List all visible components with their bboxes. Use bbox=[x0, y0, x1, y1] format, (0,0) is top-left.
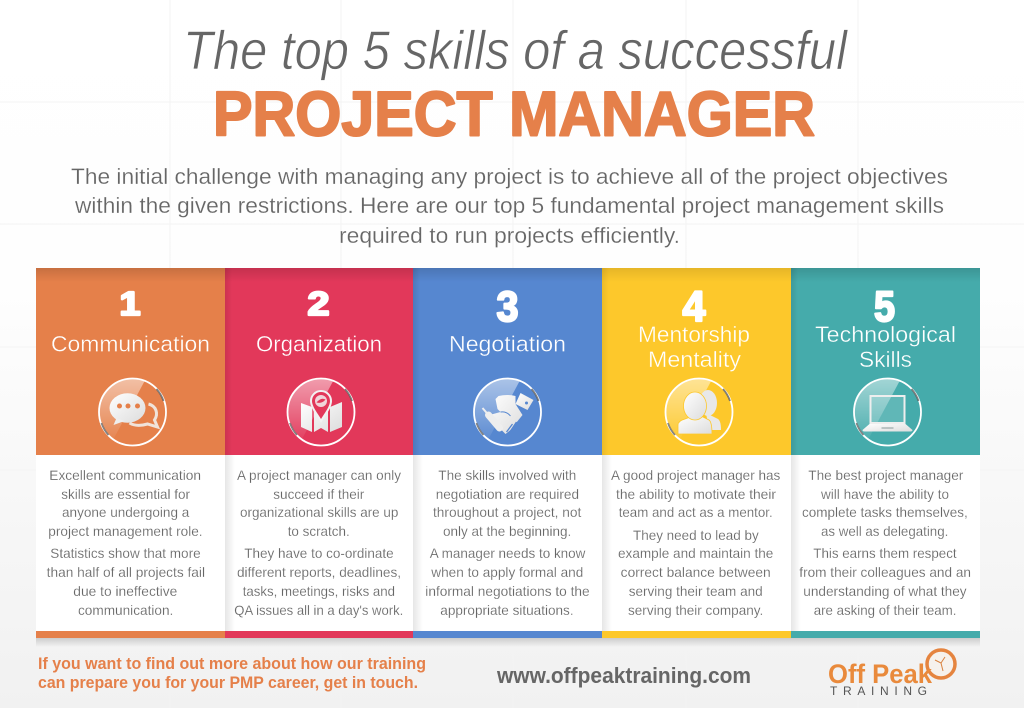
body text: complete tasks themselves, bbox=[802, 505, 968, 520]
heading: Mentality bbox=[648, 347, 741, 372]
panel: 4 Mentorship Mentality bbox=[602, 268, 791, 638]
body text: understanding of what they bbox=[803, 584, 967, 599]
number 2: 2 bbox=[308, 285, 330, 322]
body text: communication. bbox=[78, 603, 173, 618]
body text bbox=[47, 468, 205, 618]
heading: Mentorship bbox=[638, 322, 750, 347]
icon: two people bbox=[666, 378, 732, 446]
body text: different reports, deadlines, bbox=[237, 565, 401, 580]
footer call to action: can prepare you for your PMP career, get in touch. bbox=[38, 673, 418, 692]
body text bbox=[611, 468, 780, 618]
footer call to action bbox=[38, 654, 426, 692]
body text: when to apply formal and bbox=[430, 565, 583, 580]
body text: than half of all projects fail bbox=[47, 565, 205, 580]
intro paragraph: The initial challenge with managing any project is to achieve all of the project objectives bbox=[71, 164, 948, 189]
title: first line: The top 5 skills of a successful bbox=[183, 19, 849, 81]
body text: tasks, meetings, risks and bbox=[243, 584, 395, 599]
footer call to action: If you want to find out more about how our training bbox=[38, 654, 426, 673]
heading: Communication bbox=[51, 332, 210, 356]
intro paragraph: within the given restrictions. Here are our top 5 fundamental project management skills bbox=[74, 193, 944, 218]
body text: serving their team and bbox=[629, 584, 763, 599]
body text: are asking of their team. bbox=[814, 603, 956, 618]
heading: Organization bbox=[256, 332, 382, 356]
body text: the ability to motivate their bbox=[616, 487, 776, 502]
body text: Excellent communication bbox=[49, 468, 201, 483]
icon: map with pin bbox=[288, 378, 354, 446]
body text: serving their company. bbox=[628, 603, 763, 618]
panel: 2 Organization bbox=[225, 268, 413, 638]
body text bbox=[234, 468, 403, 618]
heading bbox=[815, 322, 956, 372]
body text: organizational skills are up bbox=[240, 505, 398, 520]
body text: They need to lead by bbox=[633, 528, 759, 543]
website url: www.offpeaktraining.com bbox=[496, 663, 751, 688]
body text: anyone undergoing a bbox=[62, 505, 190, 520]
panel: 5 Technological Skills bbox=[791, 268, 980, 638]
number 1: 1 bbox=[120, 285, 140, 322]
body text: This earns them respect bbox=[813, 546, 957, 561]
body text: The skills involved with bbox=[438, 468, 576, 483]
logo: Off Peak Training: Off Peak bbox=[828, 659, 933, 689]
body text: succeed if their bbox=[273, 487, 365, 502]
body text: QA issues all in a day's work. bbox=[234, 603, 403, 618]
logo clock bbox=[927, 650, 955, 678]
body text: team and act as a mentor. bbox=[619, 505, 773, 520]
title: PROJECT MANAGER: PROJECT MANAGER bbox=[213, 80, 815, 150]
heading: Negotiation bbox=[449, 332, 566, 356]
body text: The best project manager bbox=[808, 468, 964, 483]
logo: Off Peak Training bbox=[828, 650, 955, 698]
body text: example and maintain the bbox=[618, 546, 773, 561]
body text: appropriate situations. bbox=[440, 603, 574, 618]
body text: Statistics show that more bbox=[50, 546, 201, 561]
heading bbox=[638, 322, 750, 372]
heading: Skills bbox=[859, 347, 912, 372]
body text: A good project manager has bbox=[611, 468, 780, 483]
logo: Off Peak Training: TRAINING bbox=[830, 684, 927, 698]
intro paragraph bbox=[71, 164, 948, 248]
body text: correct balance between bbox=[621, 565, 771, 580]
body text: project management role. bbox=[48, 524, 203, 539]
number 4: 4 bbox=[682, 283, 706, 331]
body text: as well as delegating. bbox=[821, 524, 948, 539]
intro paragraph: required to run projects efficiently. bbox=[339, 223, 680, 248]
icon: handshake bbox=[474, 378, 541, 446]
body text: will have the ability to bbox=[820, 487, 949, 502]
body text: informal negotiations to the bbox=[425, 584, 590, 599]
panel: 1 Communication bbox=[36, 268, 225, 638]
number 3: 3 bbox=[496, 283, 518, 331]
body text: throughout a project, not bbox=[433, 505, 582, 520]
body text bbox=[799, 468, 971, 618]
icon: speech bubbles bbox=[99, 378, 166, 446]
body text: from their colleagues and an bbox=[799, 565, 971, 580]
number 5: 5 bbox=[874, 283, 895, 331]
body text: only at the beginning. bbox=[443, 524, 571, 539]
panel: 3 Negotiation bbox=[413, 268, 602, 638]
body text: skills are essential for bbox=[61, 487, 190, 502]
body text: A manager needs to know bbox=[430, 546, 586, 561]
body text: A project manager can only bbox=[237, 468, 401, 483]
body text: negotiation are required bbox=[436, 487, 579, 502]
heading: Technological bbox=[815, 322, 956, 347]
body text: to scratch. bbox=[288, 524, 350, 539]
icon: laptop bbox=[854, 378, 921, 446]
body text: They have to co-ordinate bbox=[244, 546, 394, 561]
body text bbox=[425, 468, 590, 618]
body text: due to ineffective bbox=[73, 584, 177, 599]
